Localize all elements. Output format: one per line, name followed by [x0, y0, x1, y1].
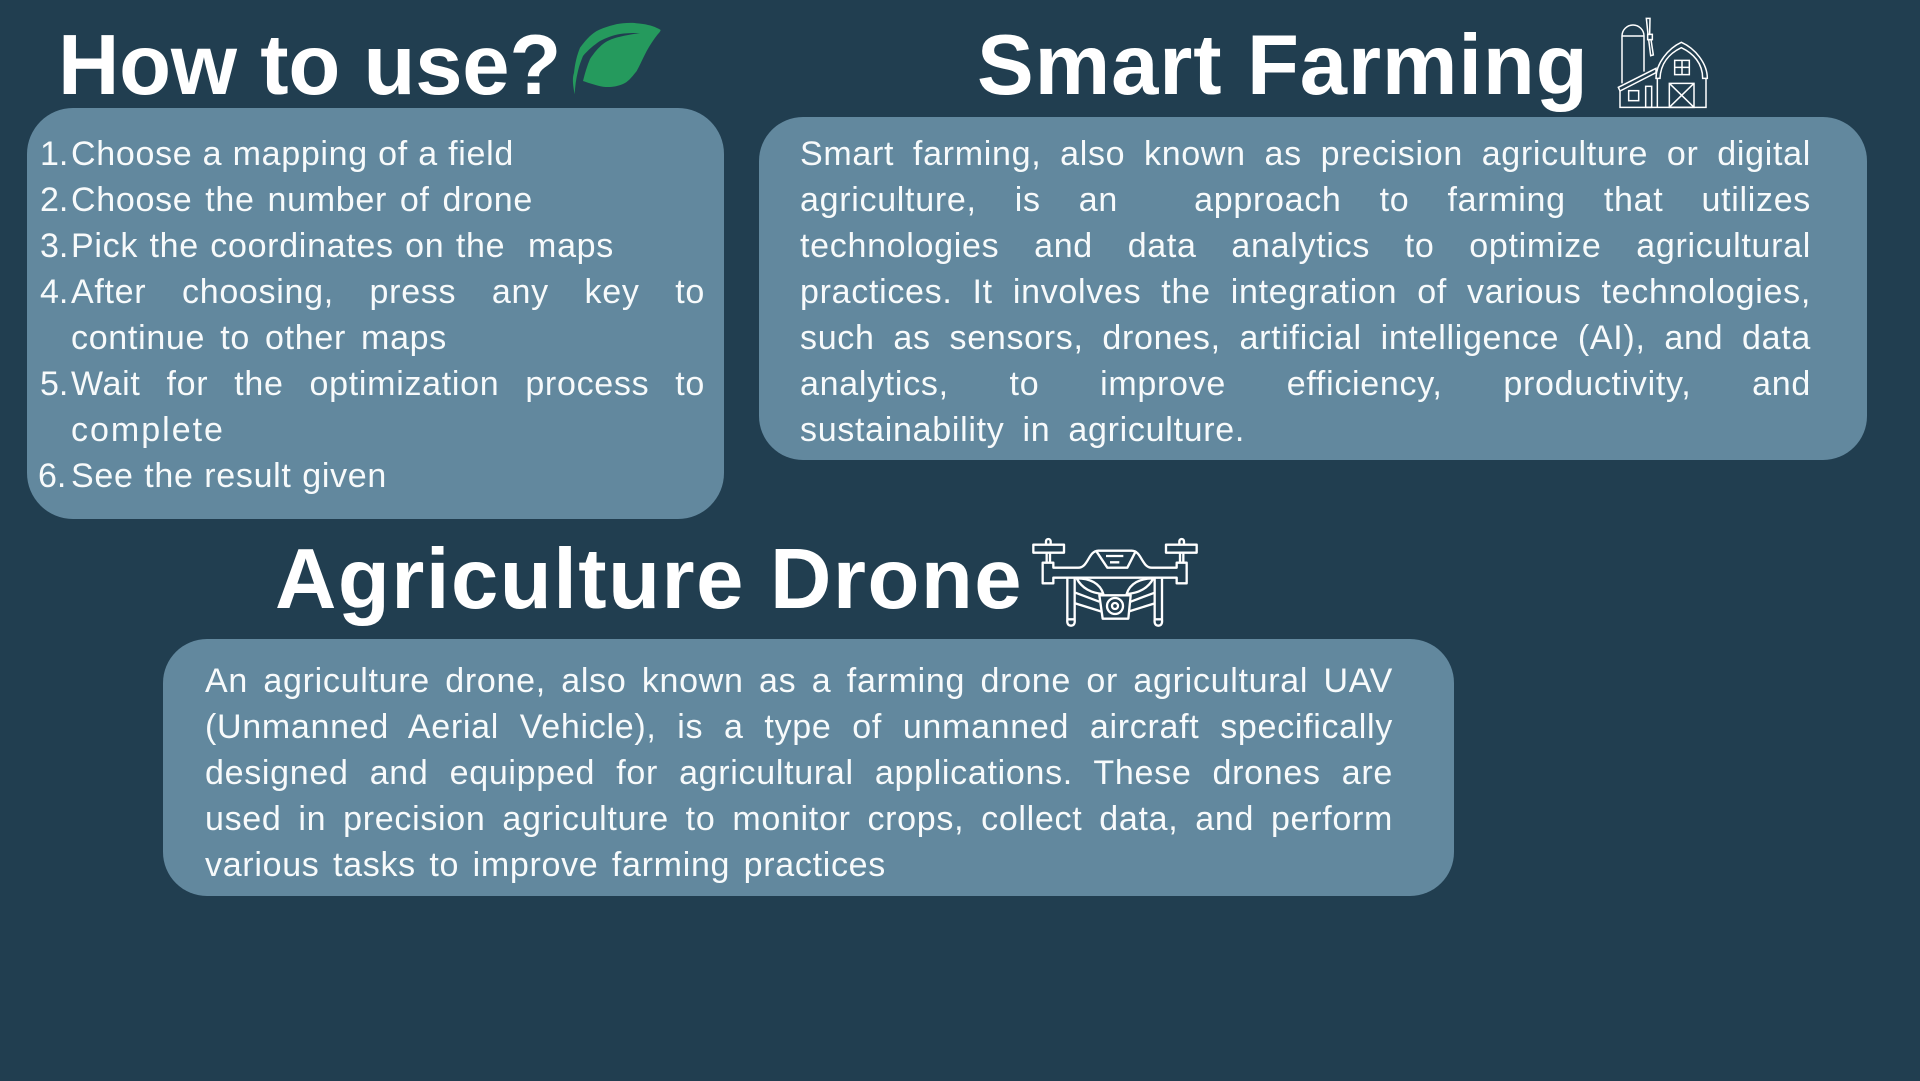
text block: how to use steps: continue to other maps — [71, 319, 447, 357]
text block: how to use steps: 5. — [40, 365, 68, 403]
text block: how to use steps: 1. — [40, 135, 68, 173]
panel: how to use — [27, 108, 724, 519]
text block: smart farming description: sustainability in agriculture. — [800, 411, 1245, 449]
text block: how to use steps: Pick the coordinates on the maps — [71, 227, 614, 265]
text block: how to use steps: Choose a mapping of a field — [71, 135, 514, 173]
text block: how to use steps: Choose the number of drone — [71, 181, 533, 219]
text block: how to use steps: 2. — [40, 181, 68, 219]
text block: how to use steps: See the result given — [71, 457, 387, 495]
text block: smart farming description: technologies and data analytics to optimize agricultural — [800, 227, 1811, 265]
text block: how to use steps: After choosing, press any key to — [71, 273, 705, 311]
text block: agriculture drone description: (Unmanned Aerial Vehicle), is a type of unmanned aircraft specifically — [205, 708, 1393, 746]
text block: smart farming description: practices. It involves the integration of various technologies, — [800, 273, 1811, 311]
text block: smart farming description — [800, 135, 1811, 449]
text block: how to use steps: 3. — [40, 227, 68, 265]
text block: smart farming description: such as sensors, drones, artificial intelligence (AI), and data — [800, 319, 1811, 357]
panel: agriculture drone — [163, 639, 1454, 896]
text block: agriculture drone description: designed and equipped for agricultural applications. These drones are — [205, 754, 1393, 792]
text block: how to use steps — [38, 135, 705, 495]
text block: agriculture drone description: various tasks to improve farming practices — [205, 846, 886, 884]
text block: how to use steps: Wait for the optimization process to — [71, 365, 705, 403]
text block: smart farming description: Smart farming, also known as precision agriculture or digital — [800, 135, 1811, 173]
icon: barn and silo — [1617, 18, 1708, 108]
text block: agriculture drone description: used in precision agriculture to monitor crops, collect data, and perform — [205, 800, 1393, 838]
heading: smart farming: Smart Farming — [977, 18, 1589, 113]
text block: agriculture drone description: An agriculture drone, also known as a farming drone or agricultural UAV — [205, 662, 1393, 700]
heading: agriculture drone: Agriculture Drone — [275, 532, 1023, 627]
text block: smart farming description: agriculture, is an approach to farming that utilizes — [800, 181, 1811, 219]
icon: drone — [1032, 538, 1198, 627]
text block: how to use steps: complete — [71, 411, 225, 449]
text block: agriculture drone description — [205, 662, 1393, 884]
panel: smart farming — [759, 117, 1867, 460]
text block: how to use steps: 4. — [40, 273, 68, 311]
heading: how to use: How to use? — [58, 18, 561, 113]
text block: how to use steps: 6. — [38, 457, 66, 495]
text block: smart farming description: analytics, to improve efficiency, productivity, and — [800, 365, 1811, 403]
